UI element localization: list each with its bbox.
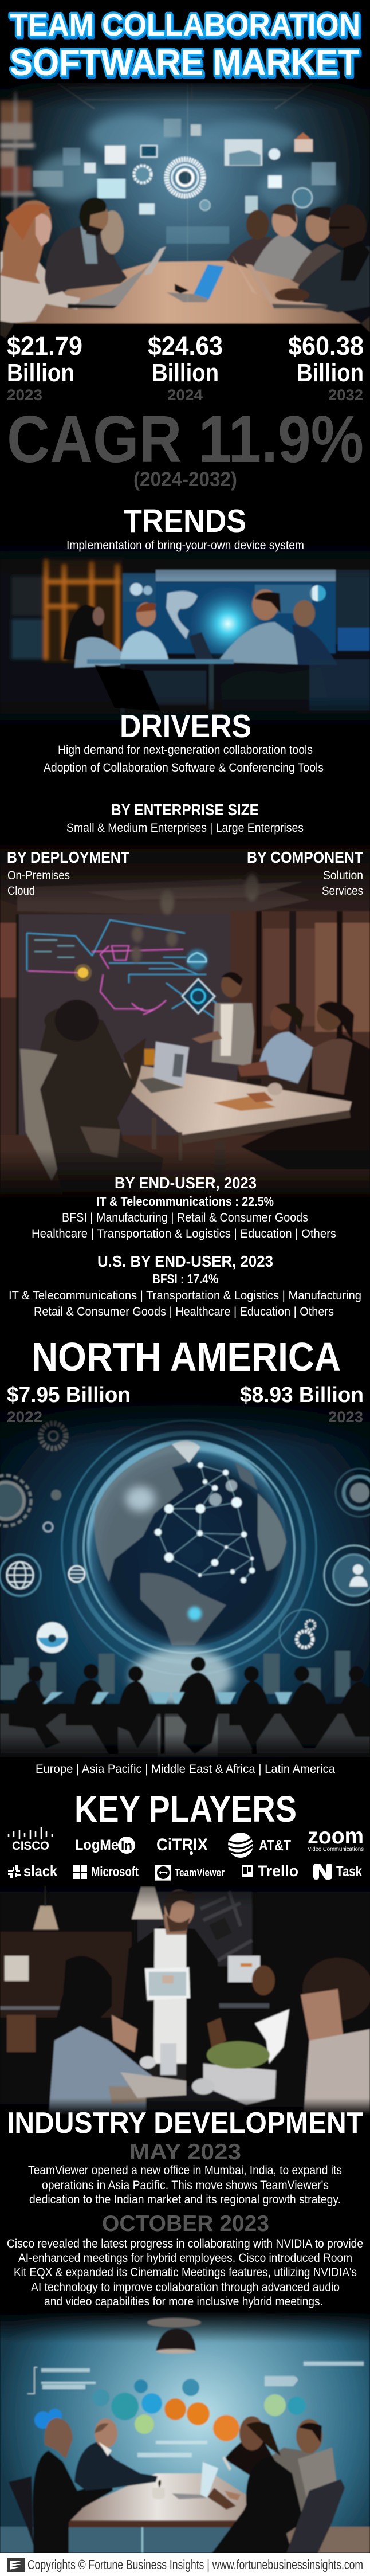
footer — [0, 2553, 370, 2576]
stat: 2032: $60.38 — [288, 331, 364, 361]
trend text: Implementation of bring-your-own device system — [66, 539, 304, 552]
development text: TeamViewer: dedication to the Indian market and its regional growth strategy. — [29, 2193, 341, 2206]
stat: North America 2022: 2022 — [7, 1408, 42, 1426]
laptops on the table — [68, 246, 328, 308]
stat: North America 2022 — [7, 1383, 131, 1426]
logo: Slack — [8, 1862, 57, 1880]
logo: Slack: slack — [23, 1862, 57, 1880]
segment: by deployment: On-Premises — [7, 869, 70, 882]
development text: Cisco — [7, 2237, 363, 2308]
panel: presenter with tablet photo — [0, 1880, 370, 2115]
logo: Trello: Trello — [258, 1862, 298, 1880]
table and chairs — [87, 659, 370, 717]
segment: by end-user 2023: BY END-USER, 2023 — [115, 1174, 257, 1192]
woman at right edge — [301, 1958, 370, 2115]
stat: 2023: $21.79 — [7, 331, 82, 361]
segment: by component: Services — [322, 884, 363, 898]
network nodes — [155, 1462, 255, 1583]
CAGR period: (2024-2032) — [133, 468, 237, 491]
logo: TeamViewer: TeamViewer — [175, 1867, 225, 1878]
stat: North America 2023 — [240, 1383, 364, 1426]
stat: 2024: $24.63 — [148, 331, 223, 361]
pendant lamps — [33, 1886, 163, 1929]
development text: Cisco: and video capabilities for more inclusive hybrid meetings. — [44, 2295, 323, 2308]
logo: Cisco: CISCO — [12, 1839, 49, 1853]
team members — [63, 589, 338, 668]
panel: globe photo with silhouettes — [0, 1396, 370, 1763]
woman in patterned top — [241, 1001, 370, 1169]
driver text: Adoption of Collaboration Software & Conferencing Tools — [44, 761, 324, 774]
people on the right side — [226, 204, 370, 312]
segment: by end-user 2023 — [32, 1174, 336, 1240]
segment: U.S. by end-user 2023: U.S. BY END-USER, 2023 — [97, 1252, 273, 1270]
table — [14, 261, 361, 323]
heading: trends: TRENDS — [124, 503, 246, 539]
side tech icons — [0, 1423, 370, 1658]
segment: by enterprise size — [66, 801, 304, 835]
stat: 2023 — [7, 331, 82, 404]
stat: 2024: Billion — [152, 359, 219, 387]
laptop — [172, 2462, 236, 2510]
presenter — [192, 972, 254, 1066]
table with plant and cups — [120, 2041, 276, 2115]
icon: central gear — [167, 159, 203, 196]
logo: AT&T — [228, 1833, 291, 1858]
segment: by enterprise size: Small & Medium Enterprises | Large Enterprises — [66, 821, 304, 835]
person: woman with red hair — [0, 201, 80, 324]
panel: hero photo of team around a table — [0, 75, 370, 338]
stat: 2023: Billion — [7, 359, 74, 387]
presenter — [120, 1890, 221, 2115]
neon board — [16, 874, 259, 1138]
segment: by end-user 2023: Healthcare | Transportation & Logistics | Education | Others — [32, 1227, 336, 1240]
development text: TeamViewer: operations in Asia Pacific. This move shows TeamViewer's — [42, 2179, 329, 2192]
people at right — [212, 2416, 345, 2553]
floor — [0, 1135, 370, 1201]
logo: Zoom: Video Communications — [308, 1846, 364, 1853]
stat: 2032: 2032 — [328, 386, 363, 404]
data wall graphics — [27, 2362, 364, 2457]
background monitors — [5, 1956, 260, 2052]
laptop — [139, 1042, 189, 1093]
logo: LogMeIn: LogMe — [75, 1837, 119, 1853]
segment: U.S. by end-user 2023: IT & Telecommunications | Transportation & Logistics | Manufacturing — [9, 1289, 361, 1302]
segment: by component: Solution — [323, 869, 363, 882]
logo: Microsoft: Microsoft — [91, 1864, 139, 1879]
logo: N Task: Task — [336, 1864, 362, 1880]
stat: 2032 — [288, 331, 364, 404]
globe on the screen — [188, 584, 268, 664]
globe — [62, 1420, 316, 1675]
person: bearded man in dark shirt — [45, 198, 127, 295]
segment: U.S. by end-user 2023: Retail & Consumer Goods | Healthcare | Education | Others — [34, 1305, 334, 1318]
development text: Cisco: AI technology to improve collaboration through advanced audio — [31, 2281, 340, 2294]
driver text: High demand for next-generation collaboration tools — [58, 743, 313, 757]
segment: by enterprise size: BY ENTERPRISE SIZE — [111, 801, 259, 819]
table, laptops and legs — [0, 1692, 370, 1757]
stat: North America 2022: $7.95 Billion — [7, 1383, 131, 1407]
market size stats — [7, 331, 364, 404]
person: bald man in suit — [74, 2418, 158, 2491]
panel: meeting room photo with data wall — [0, 2311, 370, 2553]
tablet — [145, 1967, 190, 2000]
table — [97, 1058, 352, 1192]
stat: 2024 — [148, 331, 223, 404]
date: October 2023: OCTOBER 2023 — [102, 2211, 269, 2236]
ceiling lamp — [147, 2318, 201, 2354]
logo: TeamViewer — [155, 1865, 225, 1881]
logo: Zoom: zoom — [308, 1824, 364, 1849]
stat: North America 2023: 2023 — [328, 1408, 363, 1426]
stat: North America 2023: $8.93 Billion — [240, 1383, 364, 1407]
segment: by deployment: Cloud — [7, 884, 35, 898]
segment: U.S. by end-user 2023 — [9, 1252, 361, 1318]
title — [10, 7, 360, 83]
woman with braids — [207, 1954, 306, 2115]
segment: by end-user 2023: IT & Telecommunications : 22.5% — [96, 1194, 274, 1209]
logo: Microsoft — [73, 1864, 139, 1879]
segment: by end-user 2023: BFSI | Manufacturing | Retail & Consumer Goods — [62, 1211, 308, 1224]
woman in blue top — [238, 1003, 315, 1083]
driver text — [44, 743, 324, 774]
panel: boardroom photo with neon board — [0, 835, 370, 1202]
segment: by deployment — [7, 848, 129, 898]
segment: by component — [247, 848, 363, 898]
segment: U.S. by end-user 2023: BFSI : 17.4% — [152, 1271, 218, 1286]
foreground man seated — [20, 1000, 163, 1195]
heading: North America: NORTH AMERICA — [32, 1334, 341, 1379]
logo: LogMeIn: In — [121, 1838, 132, 1853]
icon: Fortune Business Insights logo — [7, 2558, 25, 2572]
panel: trends photo of control room — [0, 530, 370, 738]
logo: N Task — [313, 1864, 362, 1880]
heading: drivers: DRIVERS — [120, 708, 251, 745]
right windows — [230, 911, 370, 1055]
stat: 2024: 2024 — [167, 386, 203, 404]
date: May 2023: MAY 2023 — [129, 2140, 241, 2164]
silhouetted team at table — [16, 1657, 370, 1705]
person: woman in black — [9, 2418, 113, 2553]
logo: Cisco — [9, 1827, 52, 1853]
logo: AT&T: AT&T — [259, 1837, 291, 1854]
table — [50, 2473, 287, 2553]
woman with striped shirt — [49, 1956, 175, 2115]
development text: TeamViewer: TeamViewer opened a new office in Mumbai, India, to expand its — [28, 2164, 342, 2177]
other regions: Europe | Asia Pacific | Middle East & Africa | Latin America — [36, 1763, 335, 1776]
segment: by deployment: BY DEPLOYMENT — [7, 848, 129, 866]
city and glow — [0, 1648, 350, 1705]
holographic icons and panels — [33, 119, 336, 244]
heading: key players: KEY PLAYERS — [74, 1788, 297, 1830]
logos: key players — [8, 1824, 364, 1881]
logo: Citrix: CiTRIX — [156, 1835, 208, 1854]
stat: 2023: 2023 — [7, 386, 42, 404]
development text: TeamViewer — [28, 2164, 342, 2206]
